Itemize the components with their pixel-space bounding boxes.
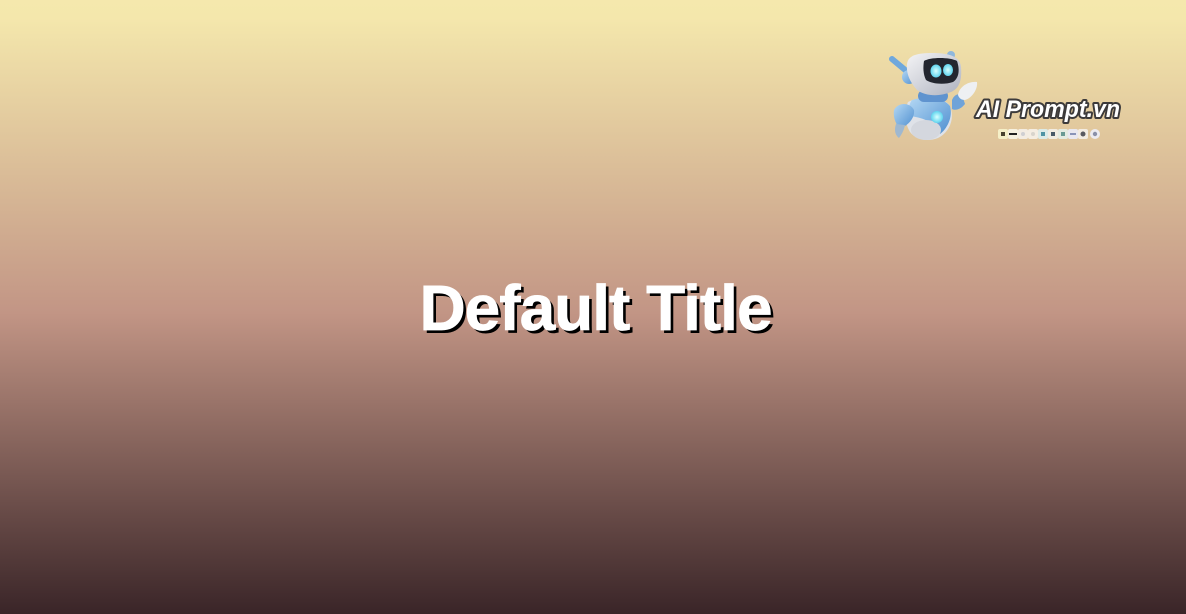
- icon: robot: [892, 51, 977, 140]
- robot antenna arm: [892, 59, 910, 74]
- logo: AI Prompt.vn robot mascot: [889, 51, 1121, 140]
- row of small badges: [998, 129, 1100, 139]
- title: Default Title: [419, 272, 772, 344]
- logo wordmark: AI Prompt.vn: [975, 96, 1120, 123]
- robot neck: [918, 90, 948, 102]
- robot raised arm: [952, 82, 977, 110]
- robot head: [907, 53, 961, 95]
- robot lower body: [894, 98, 952, 140]
